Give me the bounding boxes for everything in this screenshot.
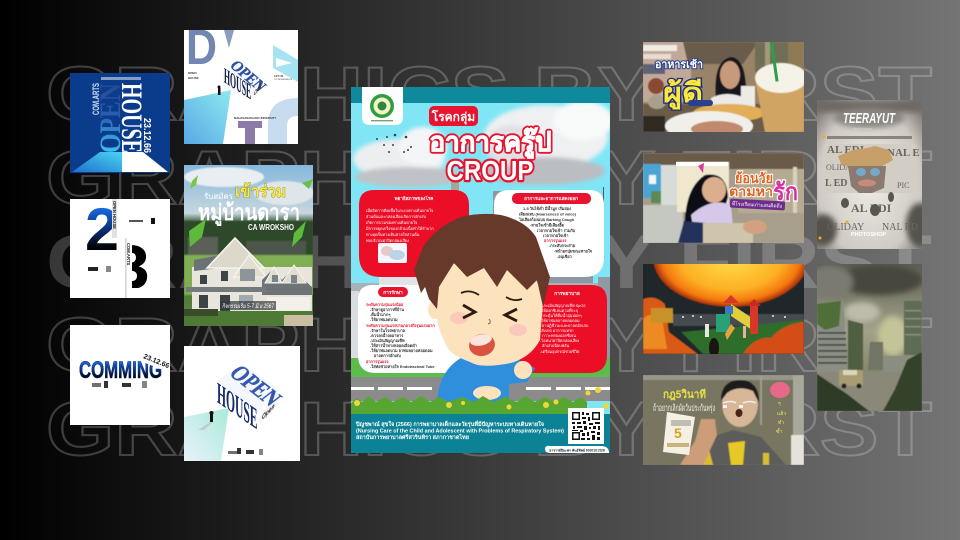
footer band: citation bbox=[351, 414, 610, 453]
panel: signs and symptoms: อาการและอาการแสดงออก bbox=[524, 196, 578, 201]
panel: treatment: -ประเมินสัญญาณชีพ bbox=[370, 337, 405, 344]
photo: man with book: กฎ5วินาที bbox=[663, 388, 706, 401]
poster: blue open house: 23.12.66 bbox=[141, 118, 152, 153]
grass bbox=[351, 387, 609, 414]
panel: nursing care: อักเสบเฉียบพลัน bbox=[542, 343, 570, 348]
panel: nursing care: การพยาบาล bbox=[554, 291, 580, 297]
panel: treatment: -รักษาในโรงพยาบาล bbox=[370, 328, 406, 333]
photo: girl thumbnail: ย้อนวัย bbox=[735, 170, 773, 186]
poster: teerayut collage: NAL E bbox=[887, 147, 920, 159]
isometric box: OPEN bbox=[226, 57, 271, 95]
panel: nursing care: ภาวะพร่องออกซิเจน bbox=[542, 333, 576, 338]
poster: teerayut collage: OLIDAY bbox=[826, 163, 856, 172]
panel: signs and symptoms: -อนุเขียว bbox=[557, 254, 572, 260]
poster: number 23: OPEN HOUSE bbox=[112, 201, 117, 229]
poster: white open house typography: LET US bbox=[274, 74, 283, 78]
character: coughing boy bbox=[414, 214, 550, 402]
photo: man with book bbox=[643, 375, 804, 465]
panel: signs and symptoms: อาการรุนแรง bbox=[544, 238, 566, 244]
birds bbox=[376, 134, 412, 153]
title bbox=[430, 127, 552, 186]
panel: treatment: -ให้ยาพ่นลดบวม ยาพ่นขยายหลอดลม bbox=[370, 347, 433, 353]
panel: treatment: -ดื่มน้ำมากๆ bbox=[370, 310, 390, 317]
logo bbox=[362, 87, 403, 125]
panel: nursing care: -ไอหนาฝาปิดกล่องเสียง bbox=[540, 338, 579, 343]
poster: house workshop: กิจกรรมเริ่ม 5-7 มิ.ย 2567 bbox=[222, 301, 275, 310]
background text: repeated GRAPHICS BY FIRST: GRAPHICS BY FIRST bbox=[46, 220, 932, 305]
title: อาการครู๊ป bbox=[430, 127, 552, 159]
isometric box: HOUSE bbox=[224, 63, 251, 104]
label: disease group bbox=[429, 106, 478, 126]
poster: number 23: 2 bbox=[85, 196, 119, 263]
panel: pathology: ทางอุดกั้นทางเดินหายใจส่วนต้น bbox=[366, 230, 420, 238]
central poster: croup bbox=[351, 87, 610, 453]
photo: girl thumbnail: ที่โรงเรียนเก่าแสนคิดถึง bbox=[732, 200, 783, 210]
poster: teerayut collage: PIC bbox=[897, 181, 909, 190]
panel: treatment: การรักษา bbox=[383, 289, 403, 296]
poster: isometric open house: OPEN bbox=[223, 361, 287, 411]
panel: nursing care: -ประเมินสัญญาณชีพ SpO2 bbox=[540, 303, 586, 308]
panel: signs and symptoms: -หน้าอกบุ๋มขณะหายใจ bbox=[554, 248, 593, 254]
panel: signs and symptoms: ไอเสียงก้องแบบ Barking Cough bbox=[518, 216, 575, 222]
poster: ruined city bbox=[817, 264, 922, 411]
panel: treatment bbox=[358, 285, 469, 373]
background text: repeated GRAPHICS BY FIRST: GRAPHICS BY FIRST bbox=[46, 303, 932, 388]
poster: house workshop bbox=[184, 165, 313, 326]
poster: white open house typography bbox=[184, 19, 298, 144]
book: 5 bbox=[674, 425, 682, 441]
panel: pathology bbox=[359, 190, 469, 277]
photo: sun over playground bbox=[643, 264, 804, 354]
book bbox=[663, 412, 695, 455]
title: CROUP bbox=[446, 155, 534, 186]
footer band: citation: (Nursing Care of the Child and Adolescent with Problems of Respiratory System) bbox=[356, 428, 564, 434]
photo: breakfast thumbnail bbox=[643, 42, 804, 132]
panel: treatment: ระดับความรุนแรงน้อย bbox=[366, 301, 404, 308]
poster: white open house typography: OPEN bbox=[188, 71, 197, 75]
panel: treatment: -ควรงดน้ำงดอาหาร bbox=[370, 331, 404, 338]
panel: nursing care bbox=[495, 285, 607, 373]
poster: teerayut collage: PHOTOSHOP bbox=[851, 232, 886, 238]
credit pill: อาจารย์ปิยะพร พันธ์ทิพย์ 6030101528 bbox=[549, 448, 605, 452]
top teal band bbox=[351, 87, 610, 103]
panel: pathology: ส่วนต้นและกล่องเสียงเกิดการอักเสบ bbox=[366, 214, 426, 219]
poster: teerayut collage: TEERAYUT bbox=[843, 110, 896, 127]
panel: signs and symptoms: 1-5 วันไข้ต่ำ มีน้ำมูก เริ่มสอง bbox=[523, 204, 571, 212]
photo: girl thumbnail bbox=[643, 153, 804, 243]
photo: girl thumbnail: ตามหา bbox=[729, 184, 773, 199]
background text: repeated GRAPHICS BY FIRST: GRAPHICS BY FIRST bbox=[46, 387, 932, 472]
background text: repeated GRAPHICS BY FIRST: GRAPHICS BY FIRST bbox=[46, 136, 932, 221]
poster: teerayut collage: L ED bbox=[825, 178, 848, 189]
poster: white open house typography: TO WORKSHOPS bbox=[274, 79, 293, 81]
poster: isometric open house: Open bbox=[262, 402, 275, 422]
photo: breakfast thumbnail: ผู้ดี bbox=[663, 78, 703, 110]
panel: nursing care: -ให้ยาพ่นขยายหลอดลม bbox=[540, 318, 580, 323]
poster: number 23 bbox=[70, 196, 170, 301]
poster: number 23: COM.ARTS bbox=[126, 243, 131, 266]
isometric box: Open bbox=[254, 79, 263, 98]
poster: white open house typography: HOUSE bbox=[188, 76, 199, 80]
poster: white open house typography: D bbox=[186, 19, 217, 75]
background text: repeated GRAPHICS BY FIRST: GRAPHICS BY FIRST bbox=[46, 52, 932, 137]
panel: treatment: -ใส่ท่อช่วยหายใจ Endotracheal Tube bbox=[370, 364, 435, 369]
poster: teerayut collage: PHOTOSHOP bbox=[853, 127, 872, 131]
poster: teerayut collage bbox=[817, 100, 922, 249]
panel: nursing care: -เตรียมอุปกรณ์ช่วยชีวิต bbox=[540, 349, 580, 355]
photo: man with book: ๆ bbox=[778, 401, 781, 407]
poster: house workshop: เข้าร่วม bbox=[235, 182, 286, 201]
poster background scene bbox=[351, 101, 613, 401]
poster: number 23: 3 bbox=[113, 234, 149, 301]
poster: comming: 23.12.66 bbox=[142, 353, 170, 370]
collage face bbox=[838, 146, 893, 193]
title: CROUP bbox=[446, 155, 534, 186]
footer band: citation: ปิญชพาณ์ สุขใจ (2566) การพยาบาลเด็กและวัยรุ่นที่มีปัญหาระบบทางเดินหายใจ bbox=[355, 420, 544, 428]
house illustration bbox=[184, 238, 313, 326]
panel: signs and symptoms bbox=[494, 190, 604, 277]
poster: isometric open house: HOUSE bbox=[217, 375, 257, 437]
poster: teerayut collage: OLIDAY bbox=[827, 222, 864, 233]
panel: pathology: พยาธิสภาพของโรค bbox=[394, 195, 433, 201]
poster: house workshop: CA WROKSHO bbox=[248, 223, 294, 232]
poster: blue open house bbox=[70, 73, 170, 173]
panel: treatment: -ให้สารน้ำทางหลอดเลือดดำ bbox=[370, 341, 417, 348]
panel: signs and symptoms: -กระสับกระส่าย bbox=[549, 243, 576, 248]
panel: treatment: -รักษาดูอาการที่บ้าน bbox=[370, 306, 404, 313]
panel: nursing care: -กระตุ้นให้ดื่มน้ำอุ่นบ่อยๆ bbox=[540, 311, 582, 319]
icon: baby bbox=[378, 243, 407, 263]
panel: signs and symptoms: เสียงแหบ (Hoarseness of voice) bbox=[519, 212, 577, 216]
panel: nursing care: -สังเกต อาการแทรก bbox=[540, 328, 574, 333]
panel: nursing care: -ให้ออกซิเจนตามที่ระบุ bbox=[540, 308, 579, 314]
label: disease group: โรคกลุ่ม bbox=[431, 109, 475, 125]
poster: teerayut collage: NAL ED bbox=[882, 222, 918, 233]
panel: nursing care: ยาปฏิชีวนะและยาลดอักเสบ bbox=[542, 323, 589, 328]
photo: man with book: ซ้ำ bbox=[776, 426, 782, 435]
background text: repeated GRAPHICS BY FIRST bbox=[46, 52, 932, 472]
footer band: citation: สถาบันการพยาบาลศรีสวรินทิรา สภากาชาดไทย bbox=[356, 433, 469, 441]
poster: comming bbox=[70, 325, 170, 425]
photo: man with book: แล้ว bbox=[777, 410, 786, 417]
panel: pathology: เกิดการบวมของทางเดินหายใจ bbox=[366, 220, 417, 225]
panel: treatment: อาการรุนแรง bbox=[366, 359, 388, 365]
credit pill bbox=[545, 446, 609, 453]
panel: pathology: มีการหยุดเกร็งของกล้ามเนื้อทำให้ลำบาก bbox=[366, 224, 434, 232]
poster: isometric open house bbox=[184, 346, 300, 461]
title: อาการครู๊ป bbox=[430, 127, 552, 159]
poster: teerayut collage: AL EDI bbox=[851, 201, 892, 215]
poster: white open house typography: MAHASARAKHAM UNIVERSITY bbox=[234, 116, 276, 120]
panel: signs and symptoms: เวลาหายใจเข้า bbox=[543, 232, 568, 238]
photo: breakfast thumbnail: อาหารเช้า bbox=[655, 58, 703, 71]
poster: house workshop: รับสมัคร bbox=[204, 192, 234, 201]
panel: treatment: ระดับความรุนแรงปานกลางถึงรุนแรงมาก bbox=[366, 322, 435, 329]
panel: pathology: เมื่อติดการติดเชื้อในระบบทางเดินหายใจ bbox=[366, 206, 433, 213]
panel: treatment: -ให้ยาพ่นลดบวม bbox=[370, 316, 398, 322]
photo: man with book: ทำ bbox=[778, 420, 784, 426]
panel: pathology: พบบริเวณฝาปิดกล่องเสียง bbox=[366, 238, 409, 243]
panel: signs and symptoms: -หายใจเข้ามีเสียงฮี้ด bbox=[530, 220, 565, 228]
panel: signs and symptoms: เวลาหายใจเข้า ร่วมกับ bbox=[537, 227, 576, 233]
QR code bbox=[568, 408, 604, 444]
photo: girl thumbnail: รัก bbox=[773, 179, 798, 206]
poster: teerayut collage: AL EDI bbox=[827, 144, 864, 156]
panel: treatment: ยาลดการอักเสบ bbox=[374, 353, 401, 358]
photo: man with book: ถ้าอยากเลิกผัดวันประกันพรุ่ง bbox=[653, 403, 715, 414]
